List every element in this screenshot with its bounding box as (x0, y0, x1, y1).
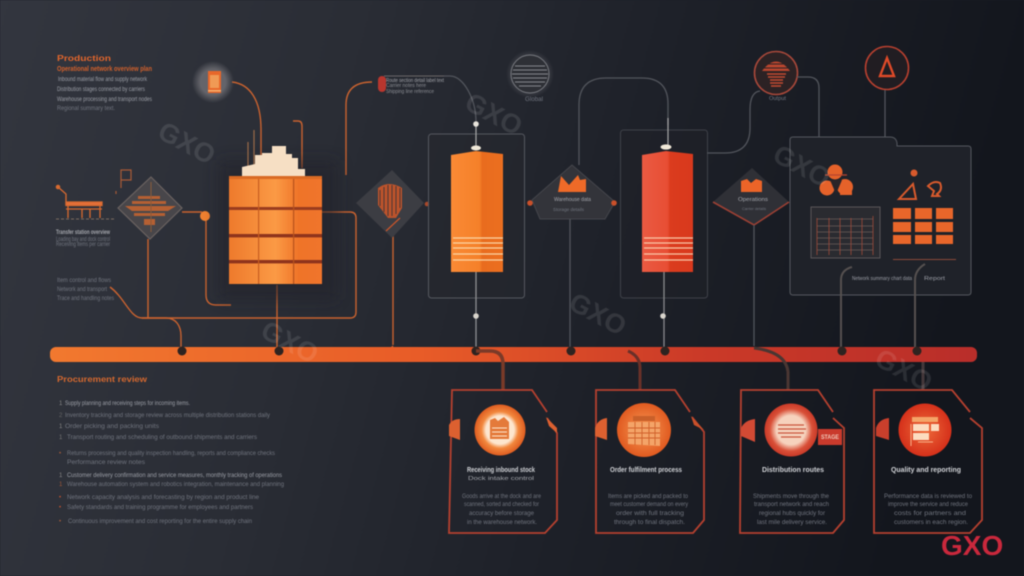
icon: conveyor cart (56, 185, 116, 219)
icon: people group (820, 164, 853, 196)
connector: diamond 3 to bar (753, 225, 755, 346)
watermark: GXO repeated: GXO (460, 87, 527, 141)
text panel: bottom left list: 1 (59, 435, 63, 441)
watermark: GXO repeated: GXO (564, 287, 631, 341)
diamond node 1 (118, 177, 182, 239)
text panel: bottom left list: Transport routing and scheduling of outbound shipments and carriers (67, 435, 257, 441)
text panel: bottom left list: • (59, 451, 61, 457)
heading block: top left: Distribution stages connected by carriers (57, 87, 145, 93)
panel: orange column (428, 121, 524, 348)
heading block: top left: Warehouse processing and transport nodes (57, 97, 152, 103)
text panel: bottom left list (57, 375, 284, 525)
panel captions: Report (924, 276, 946, 282)
card 2 (595, 390, 704, 533)
text: left note: Trace and handling notes (57, 296, 114, 302)
text panel: bottom left list: Performance review notes (67, 460, 145, 466)
text panel: bottom left list: 1 (59, 482, 63, 488)
text panel: bottom left list: Customer delivery confirmation and service measures, monthly tracking of operations (67, 473, 282, 479)
text: cart caption (56, 230, 110, 248)
card 4: Quality and reporting (891, 467, 961, 474)
card 4: customers in each region. (894, 520, 968, 526)
card 3: Shipments move through the (753, 494, 830, 500)
watermark: GXO repeated: GXO (153, 116, 220, 170)
heading block: top left: Regional summary text. (57, 106, 115, 112)
text panel: bottom left list: Inventory tracking and storage review across multiple distribution stations daily (65, 413, 270, 419)
connector lines: left network (110, 82, 393, 352)
table (811, 207, 880, 258)
pentagon node: Warehouse data (554, 197, 592, 203)
icon: P flag (116, 170, 131, 194)
panel captions: Network summary chart data (852, 276, 912, 282)
node: orange junction (200, 211, 210, 221)
connector: to column 2 (579, 78, 668, 165)
diamond node 3 (713, 168, 789, 225)
icon: circle with dome: Output (769, 96, 787, 102)
text: left note (57, 278, 114, 302)
text panel: bottom left list: 2 (59, 413, 63, 419)
text panel: bottom left list: Supply planning and receiving steps for incoming items. (65, 401, 190, 407)
card 4: improve the service and reduce (888, 502, 969, 508)
card 1: Dock intake control (468, 476, 534, 482)
text panel: bottom left list: Order picking and packing units (65, 424, 159, 430)
connectors: bar to cards (476, 348, 923, 390)
text: left note: Network and transport (57, 287, 107, 293)
card 2: order with full tracking (616, 511, 684, 517)
building block chart (218, 130, 338, 300)
text panel: bottom left list: • (59, 495, 61, 501)
text panel: bottom left list: 1 (59, 424, 63, 430)
panel: dashboard folder (790, 137, 971, 295)
text panel: bottom left list: Warehouse automation system and robotics integration, maintenance and planning (67, 482, 284, 488)
red pill label: Carrier notes here (386, 83, 426, 89)
diamond node 3: Operations (738, 197, 769, 203)
heading block: top left: Operational network overview plan (57, 66, 152, 73)
card 2: through to final dispatch. (614, 520, 685, 526)
icon: globe circle (506, 50, 554, 103)
bar junction dots (178, 346, 922, 356)
text: cart caption: Transfer station overview (56, 230, 110, 236)
card 2: meet customer demand on every (610, 502, 688, 508)
icon: circle with triangle (866, 46, 908, 90)
heading block: top left: Inbound material flow and supply network (58, 77, 148, 83)
tag: STAGE (821, 435, 839, 441)
heading block: top left: Production (57, 54, 111, 63)
card 2: Items are picked and packed to (608, 494, 689, 500)
card 3: transport network and reach (754, 502, 829, 508)
card 2: Order fulfilment process (610, 467, 682, 474)
text: left note: Item control and flows (57, 278, 111, 284)
text panel: bottom left list: • (59, 519, 61, 525)
card 4: Performance data is reviewed to (884, 494, 973, 500)
text panel: bottom left list: Returns processing and quality inspection handling, reports and compliance checks (67, 451, 275, 457)
icon: figures (899, 170, 941, 199)
connector: pentagon to bar (569, 219, 571, 348)
text panel: bottom left list: Safety standards and training programme for employees and partners (67, 505, 253, 511)
red pill label: Route section detail label text (386, 78, 445, 84)
watermark: GXO repeated: GXO (256, 315, 323, 369)
card 4: costs for partners and (894, 511, 966, 517)
card 1: in the warehouse network. (467, 520, 537, 526)
text: cart caption: Loading bay and dock control (56, 237, 110, 243)
card 4 (874, 390, 982, 533)
diamond node 2 (356, 170, 429, 238)
panel captions (852, 276, 946, 282)
card 3 (740, 390, 844, 533)
card 1 (449, 390, 557, 533)
icon: circle with dome (754, 52, 798, 102)
panel: red column (620, 118, 708, 348)
red pill label: Shipping line reference (386, 89, 434, 95)
orange grid (893, 208, 953, 244)
card 1: accuracy before storage (469, 511, 535, 517)
icon: top left container in glowing circle (192, 61, 234, 103)
text panel: bottom left list: 1 (59, 401, 63, 407)
pentagon node (527, 165, 617, 219)
text: cart caption: Receiving items per carrier (56, 242, 110, 248)
text panel: bottom left list: • (59, 505, 61, 511)
watermark: GXO repeated (153, 87, 937, 397)
tag (818, 429, 842, 445)
diamond node 3: Carrier details (742, 206, 766, 211)
card 1: scanned, sorted and checked for (464, 502, 539, 508)
connectors: panel to bar (841, 264, 925, 350)
card 3: last mile delivery service. (757, 520, 827, 526)
heading block: top left (57, 54, 152, 112)
text panel: bottom left list: Procurement review (57, 375, 148, 384)
card 3: Distribution routes (762, 467, 824, 474)
text panel: bottom left list: Continuous improvement and cost reporting for the entire supply chain (68, 519, 252, 525)
watermark: GXO repeated: GXO (768, 139, 835, 193)
connector: pill to column 1 (444, 76, 476, 122)
card 1: Goods arrive at the dock and are (462, 494, 542, 500)
red pill label (378, 76, 446, 95)
connectors: right network (707, 77, 885, 153)
card 3: regional hubs quickly for (759, 511, 825, 517)
pentagon node: Storage details (553, 207, 585, 212)
text panel: bottom left list: Network capacity analysis and forecasting by region and product line (67, 495, 260, 501)
card 1: Receiving inbound stock (467, 467, 535, 474)
timeline bar (50, 347, 977, 362)
icon: globe circle: Global (525, 97, 543, 103)
brand logo: GXO: GXO (941, 530, 1003, 561)
text panel: bottom left list: 1 (59, 473, 63, 479)
watermark: GXO repeated: GXO (870, 343, 937, 397)
